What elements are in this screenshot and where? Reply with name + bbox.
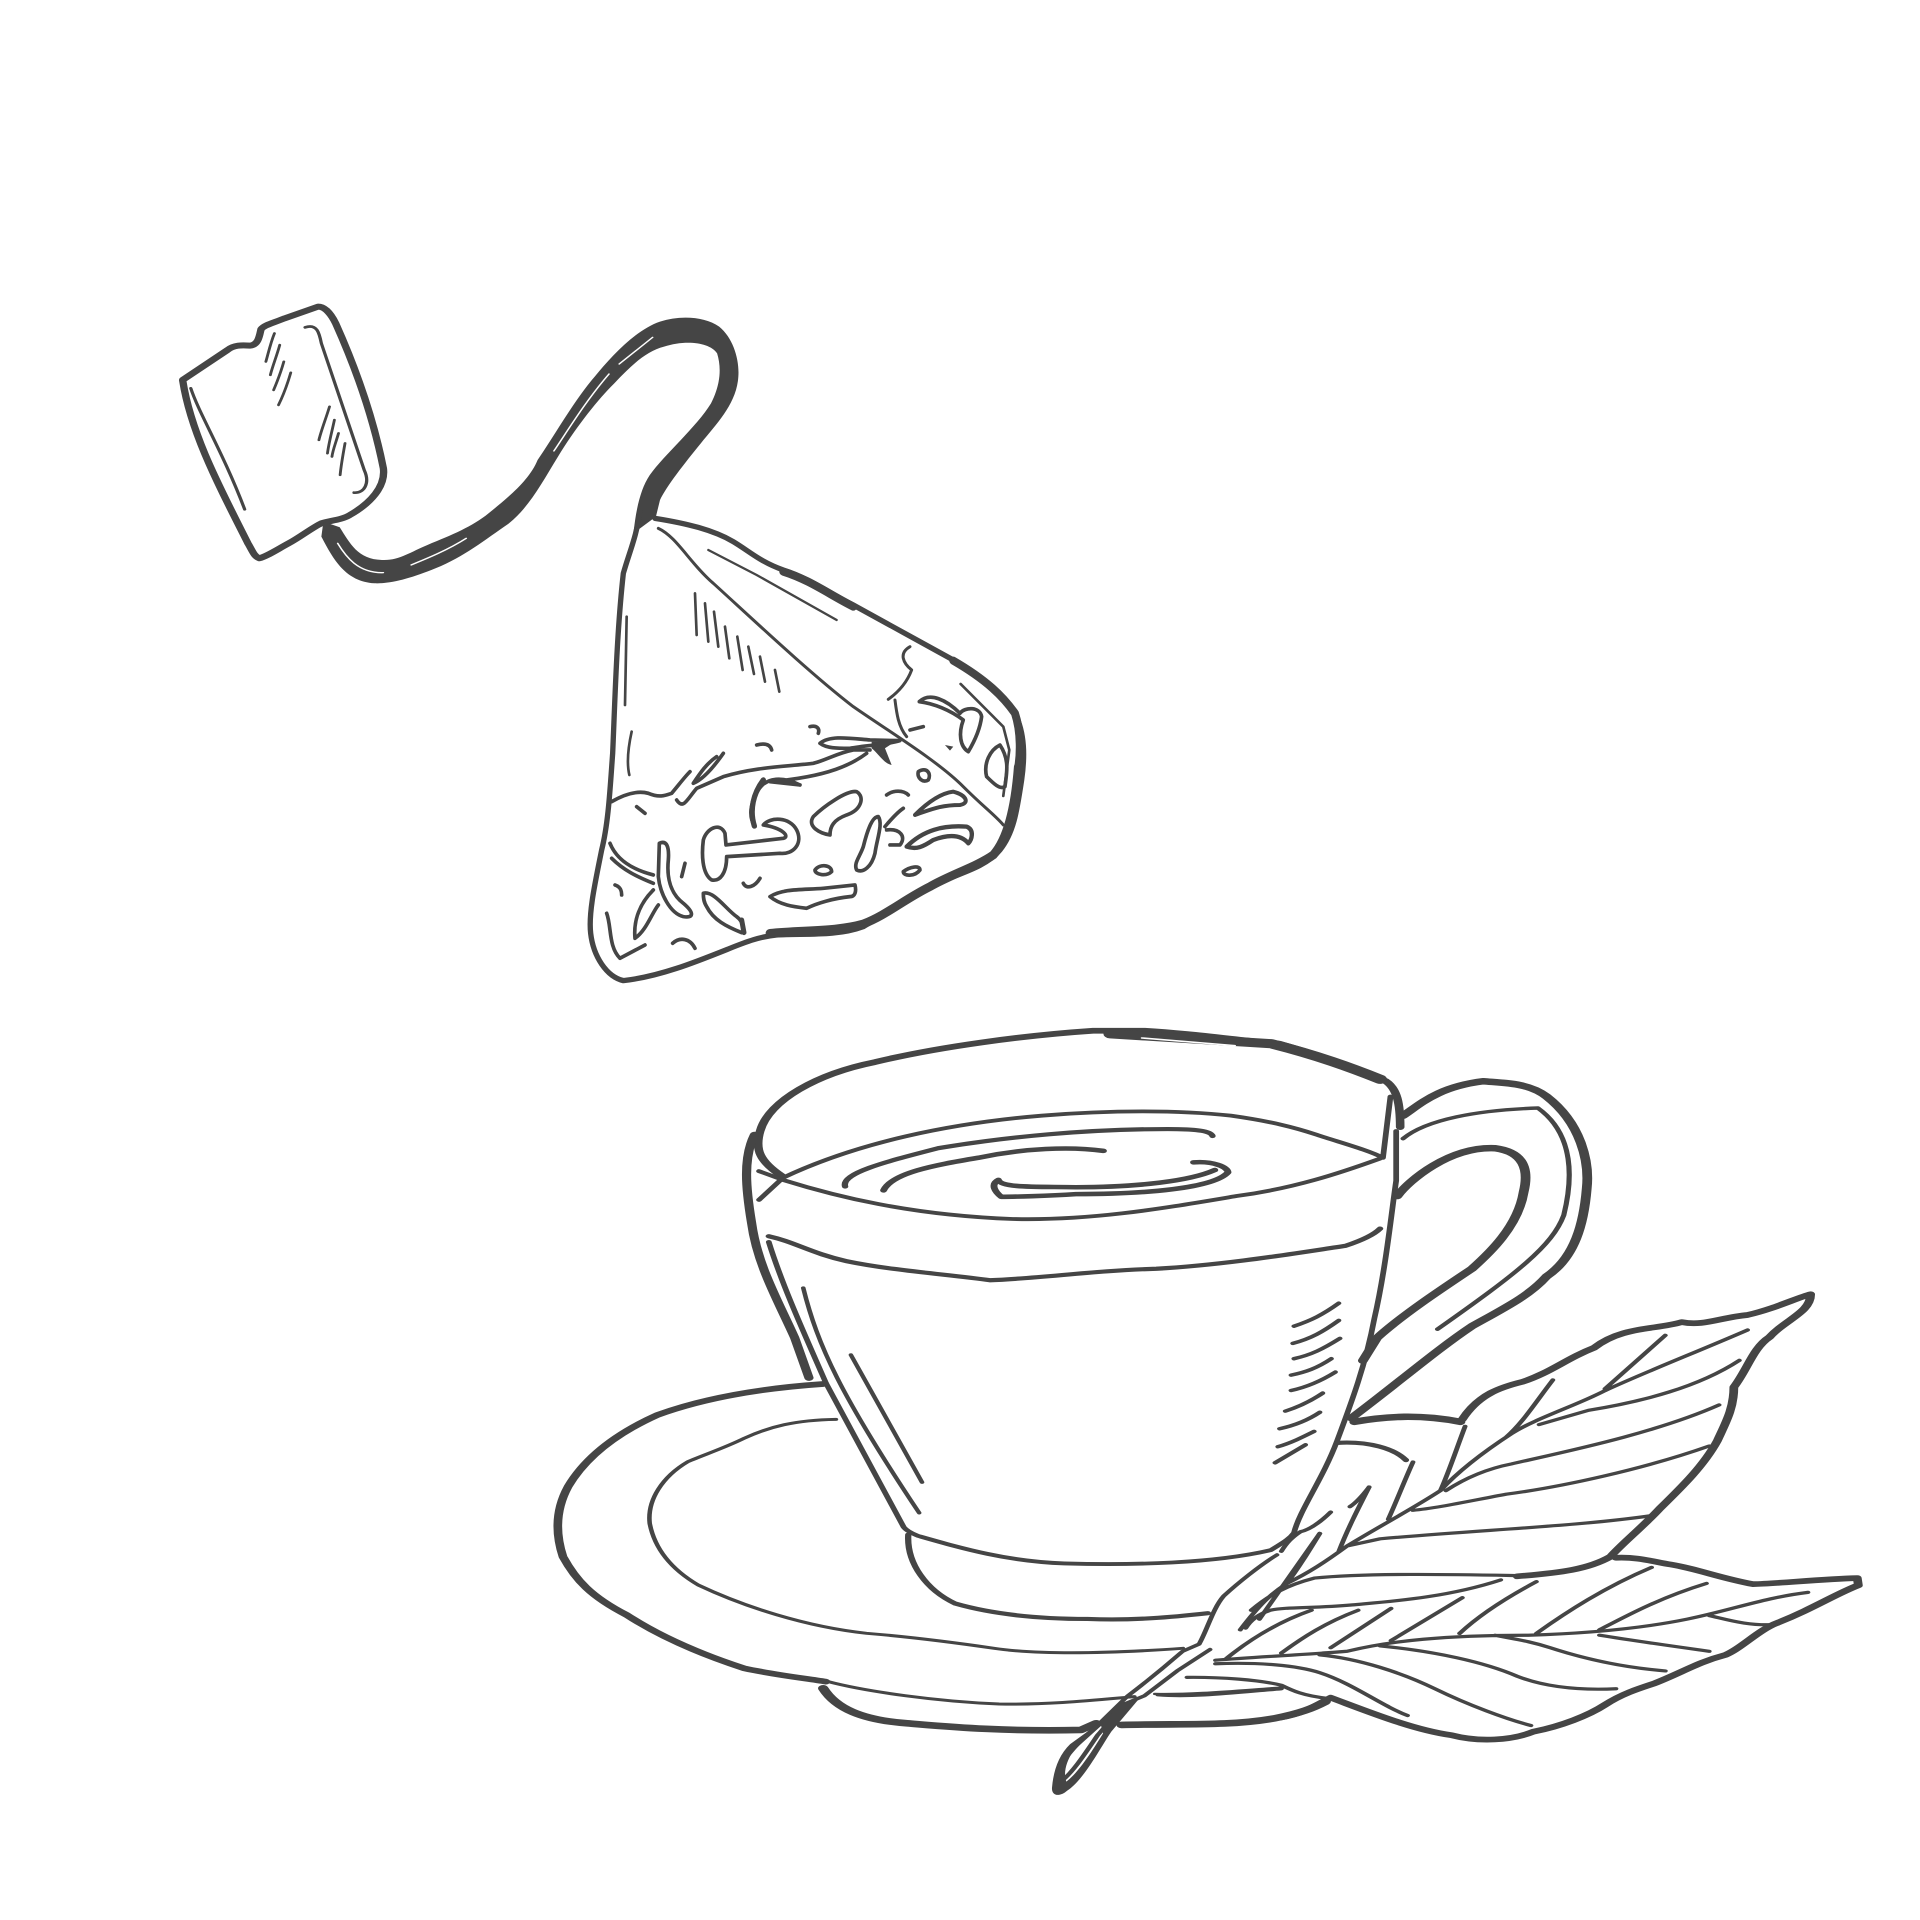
tea cup [747,1031,1587,1619]
tea swirl [845,1129,1212,1186]
saucer inner well [649,1419,1183,1653]
lower leaf outline [1281,1558,1858,1740]
icon: paper tag [183,307,384,558]
saucer outer rim [558,1384,826,1682]
cup rim [758,1031,1400,1176]
saucer front edge [828,1682,1134,1704]
cup hatching [1275,1303,1340,1463]
tea bag pyramid [590,510,1024,981]
saucer [558,1384,1326,1730]
tea bag string [321,318,738,583]
cup handle [1351,1081,1587,1418]
lower leaf midrib and veins [1216,1592,1808,1726]
upper leaf midrib and veins [1240,1330,1748,1630]
mint leaves [1052,1294,1858,1795]
cup foot [908,1535,1208,1619]
tea leaves inside bag [607,697,1007,958]
bag outline [590,510,1024,981]
saucer foot [823,1688,1326,1730]
tea bag tag and string [183,307,738,583]
tea surface [759,1097,1390,1200]
stem [1061,1487,1369,1782]
upper leaf outline [1462,1294,1811,1576]
bag fold and hatching [658,528,1009,825]
cup lip band [769,1229,1380,1280]
cup body [747,1135,809,1378]
